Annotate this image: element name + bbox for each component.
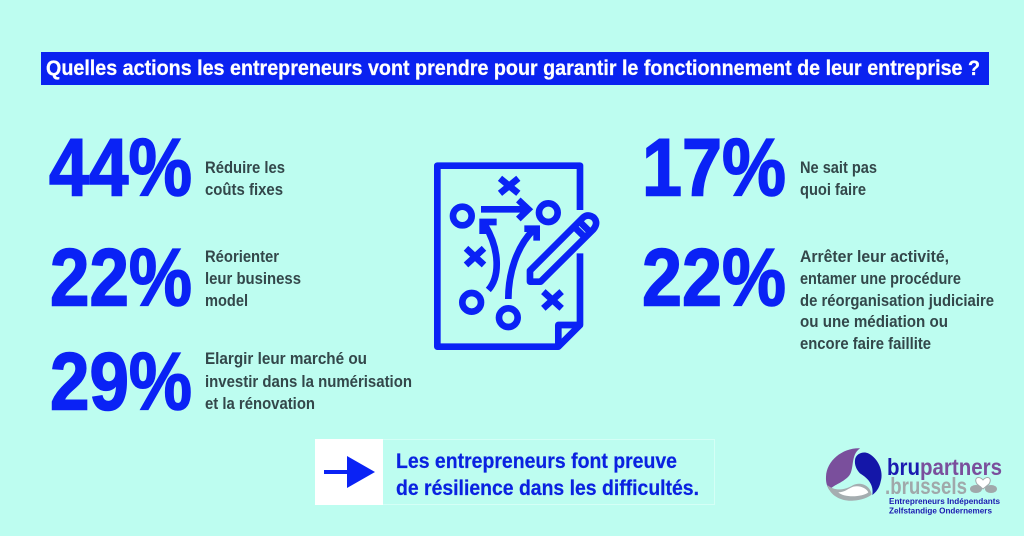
stat: 22% stop activity: 22% [642, 232, 786, 324]
logo: brupartners.brussels: Entrepreneurs Indépendants [889, 496, 1000, 506]
stat: 22% stop activity: entamer une procédure [800, 269, 961, 288]
icon: arrow [324, 456, 375, 488]
logo: brupartners.brussels: .brussels [885, 473, 967, 499]
stat: 29%: 29% [50, 336, 192, 428]
title [41, 52, 989, 85]
callout: Les entrepreneurs font preuve [396, 450, 677, 473]
stat: 22% stop activity: de réorganisation judiciaire [800, 291, 994, 310]
stat: 22% stop activity: encore faire faillite [800, 334, 931, 353]
stat: 22% stop activity [642, 232, 994, 353]
stat: 22% business model [50, 232, 301, 324]
callout [315, 439, 714, 505]
stat: 22% stop activity: ou une médiation ou [800, 312, 948, 331]
stat: 17% [642, 122, 877, 214]
stat: 29%: et la rénovation [205, 394, 315, 413]
stat: 22% business model: Réorienter [205, 247, 279, 266]
logo: brupartners.brussels [826, 448, 1002, 516]
stat: 44%: 44% [49, 122, 192, 214]
stat: 22% stop activity: Arrêter leur activité, [800, 247, 949, 266]
stat: 17%: quoi faire [800, 180, 866, 199]
stat: 22% business model: model [205, 291, 248, 310]
stat: 17%: Ne sait pas [800, 158, 877, 177]
callout: de résilience dans les difficultés. [396, 477, 699, 500]
stat: 44%: coûts fixes [205, 180, 283, 199]
stat: 29% [50, 336, 412, 428]
icon: strategy plan with pencil [437, 166, 596, 347]
logo: brupartners.brussels: Zelfstandige Ondernemers [889, 506, 992, 516]
stat: 29%: Elargir leur marché ou [205, 349, 367, 368]
stat: 44%: Réduire les [205, 158, 285, 177]
stat: 22% business model: 22% [50, 232, 192, 324]
stat: 44% [49, 122, 285, 214]
stat: 17%: 17% [642, 122, 786, 214]
stat: 22% business model: leur business [205, 269, 301, 288]
logo: brupartners.brussels: brupartners [887, 454, 1002, 480]
title: Quelles actions les entrepreneurs vont prendre pour garantir le fonctionnement de leur entreprise ? [46, 57, 980, 80]
stat: 29%: investir dans la numérisation [205, 372, 412, 391]
